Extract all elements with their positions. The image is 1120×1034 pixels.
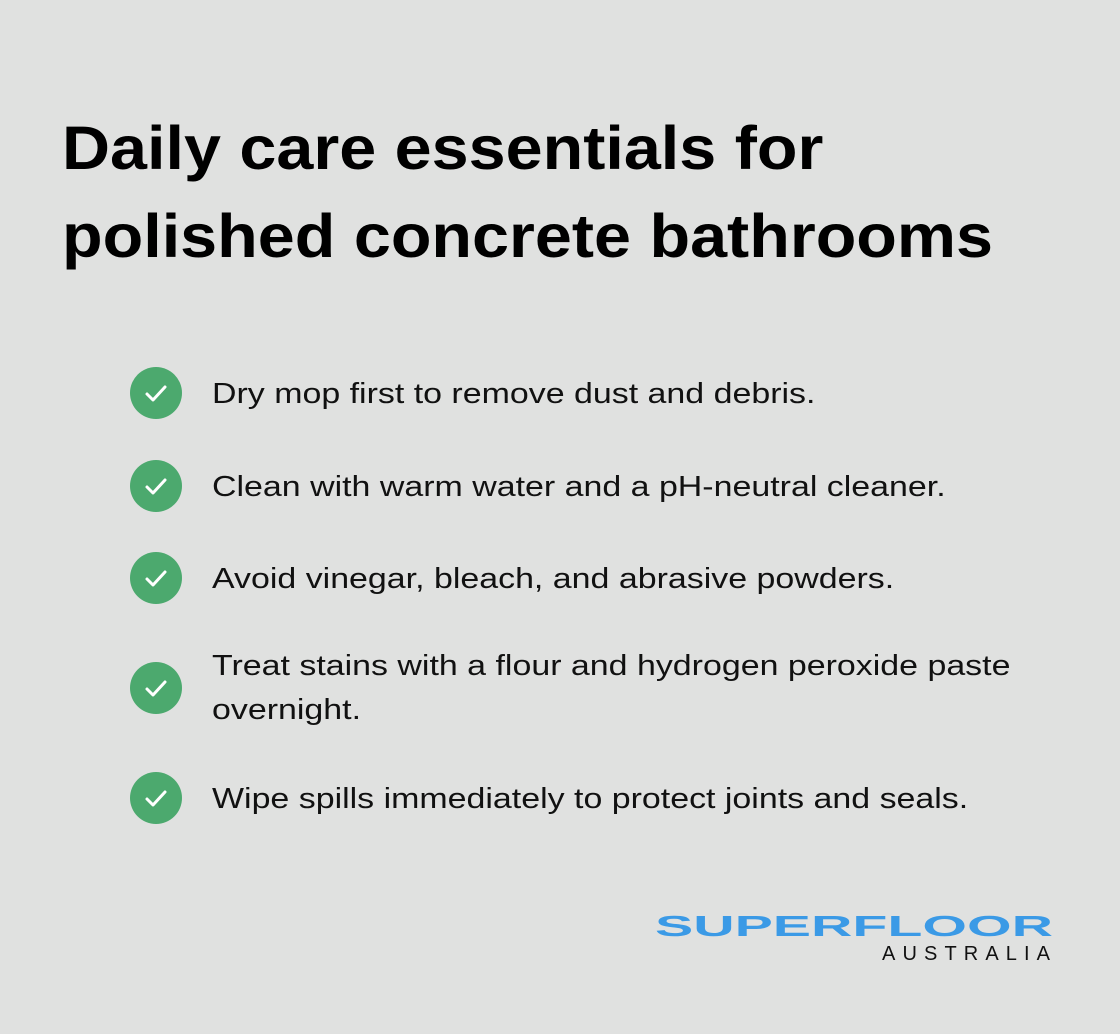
item 5: [130, 772, 968, 824]
text: Clean with warm water and a pH-neutral cleaner.: [212, 471, 946, 503]
text: Wipe spills immediately to protect joints and seals.: [212, 783, 968, 815]
text: Dry mop first to remove dust and debris.: [212, 378, 815, 410]
logo: SUPERFLOOR: [655, 911, 1053, 943]
icon: check: [130, 460, 182, 512]
icon: check: [130, 662, 182, 714]
text: overnight.: [212, 694, 361, 726]
item 3: [130, 552, 894, 604]
icon: check: [130, 772, 182, 824]
text: [212, 650, 1010, 726]
title: Daily care essentials for: [62, 114, 823, 182]
title: [62, 114, 993, 270]
text: Avoid vinegar, bleach, and abrasive powders.: [212, 563, 894, 595]
item 1: [130, 367, 815, 419]
text: Treat stains with a flour and hydrogen peroxide paste: [212, 650, 1010, 682]
title: polished concrete bathrooms: [62, 202, 993, 270]
item 2: [130, 460, 946, 512]
item 4: [130, 650, 1010, 726]
logo: AUSTRALIA: [882, 943, 1051, 965]
icon: check: [130, 367, 182, 419]
logo: [655, 911, 1053, 965]
icon: check: [130, 552, 182, 604]
